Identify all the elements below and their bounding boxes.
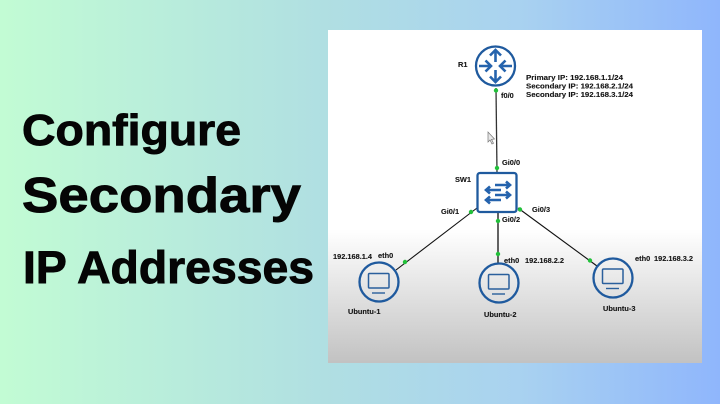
label: Ubuntu-2 eth0: eth0	[504, 256, 519, 265]
label: Ubuntu-3 eth0: eth0	[635, 254, 650, 263]
label: R1 IP addresses: Primary IP: 192.168.1.1/24	[526, 73, 624, 82]
link status dots	[403, 88, 592, 264]
link: SW1 to Ubuntu-2	[497, 212, 499, 263]
link: SW1 to Ubuntu-3	[518, 208, 597, 266]
label: Ubuntu-1 address: 192.168.1.4	[333, 252, 373, 261]
icon: computer Ubuntu-3	[594, 258, 632, 298]
label: Gi0/0: Gi0/0	[502, 158, 520, 167]
label: SW1: SW1	[455, 175, 471, 184]
label: Gi0/3: Gi0/3	[532, 205, 550, 214]
label: Ubuntu-3: Ubuntu-3	[603, 304, 635, 313]
panel: network diagram	[328, 30, 702, 363]
icon: computer Ubuntu-1	[360, 262, 398, 302]
label: Ubuntu-3 address: 192.168.3.2	[654, 254, 693, 263]
label: R1 IP addresses: Secondary IP: 192.168.3.1/24	[526, 90, 634, 99]
title	[22, 106, 314, 293]
panel background	[328, 30, 702, 363]
label: Ubuntu-2 address: 192.168.2.2	[525, 256, 564, 265]
label: R1: R1	[458, 60, 467, 69]
label: Ubuntu-1 eth0: eth0	[378, 251, 393, 260]
title line: IP Addresses: IP Addresses	[23, 242, 314, 293]
link: SW1 to Ubuntu-1	[396, 208, 477, 270]
icon: switch SW1	[478, 173, 516, 212]
icon: mouse cursor	[488, 132, 494, 144]
icon: router R1	[476, 46, 515, 86]
label: R1 IP addresses	[526, 73, 634, 99]
title line: Configure: Configure	[22, 106, 241, 155]
label: Gi0/2: Gi0/2	[502, 215, 520, 224]
label: R1 IP addresses: Secondary IP: 192.168.2.1/24	[526, 82, 634, 90]
label: Gi0/1: Gi0/1	[441, 207, 459, 216]
icon: computer Ubuntu-2	[480, 264, 518, 302]
label: Ubuntu-1: Ubuntu-1	[348, 307, 380, 316]
link: R1 to SW1	[496, 88, 497, 173]
title line: Secondary: Secondary	[22, 169, 301, 223]
label: Ubuntu-2: Ubuntu-2	[484, 310, 516, 319]
label: f0/0: f0/0	[501, 91, 514, 100]
